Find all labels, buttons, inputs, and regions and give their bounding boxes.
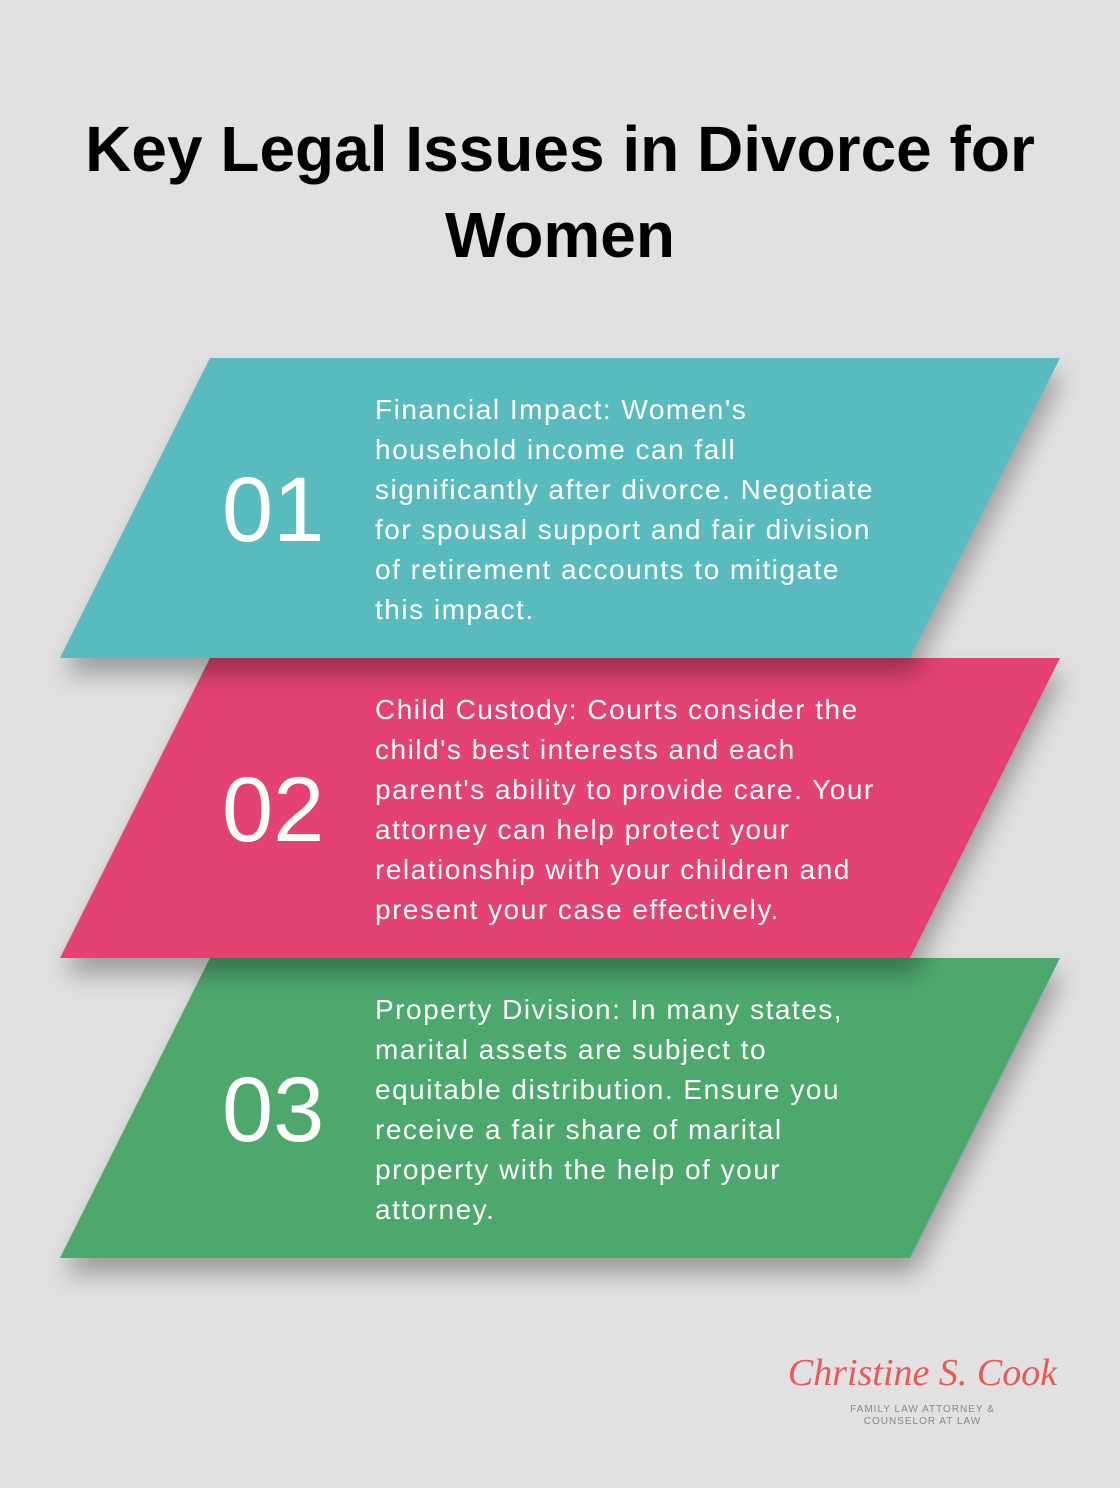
text 3: attorney. [375, 1194, 495, 1225]
text 3: property with the help of your [375, 1154, 781, 1185]
text 2: present your case effectively. [375, 894, 780, 925]
logo [788, 1352, 1058, 1427]
text 2: child's best interests and each [375, 734, 796, 765]
text 3: equitable distribution. Ensure you [375, 1074, 840, 1105]
logo: Christine S. Cook [788, 1352, 1057, 1394]
number 02: 02 [222, 759, 324, 861]
text 3: marital assets are subject to [375, 1034, 767, 1065]
text 1: household income can fall [375, 434, 736, 465]
number 03: 03 [222, 1059, 324, 1161]
text 2: attorney can help protect your [375, 814, 790, 845]
text 3: receive a fair share of marital [375, 1114, 783, 1145]
title [85, 113, 1035, 271]
title: Key Legal Issues in Divorce for [85, 113, 1035, 185]
text 1: for spousal support and fair division [375, 514, 871, 545]
text 2: relationship with your children and [375, 854, 851, 885]
text 1 [375, 394, 874, 625]
text 1: Financial Impact: Women's [375, 394, 747, 425]
panel 3 shape [60, 958, 1060, 1258]
text 3: Property Division: In many states, [375, 994, 843, 1025]
text 2: parent's ability to provide care. Your [375, 774, 875, 805]
panel 2 shape [60, 658, 1060, 958]
panel 1 shape [60, 358, 1060, 658]
text 1: of retirement accounts to mitigate [375, 554, 840, 585]
text 3 [375, 994, 843, 1225]
title: Women [445, 199, 675, 271]
logo: FAMILY LAW ATTORNEY & [850, 1404, 995, 1415]
text 2 [375, 694, 875, 925]
number 01: 01 [222, 459, 324, 561]
text 2: Child Custody: Courts consider the [375, 694, 859, 725]
text 1: this impact. [375, 594, 535, 625]
logo: COUNSELOR AT LAW [864, 1416, 981, 1427]
text 1: significantly after divorce. Negotiate [375, 474, 874, 505]
